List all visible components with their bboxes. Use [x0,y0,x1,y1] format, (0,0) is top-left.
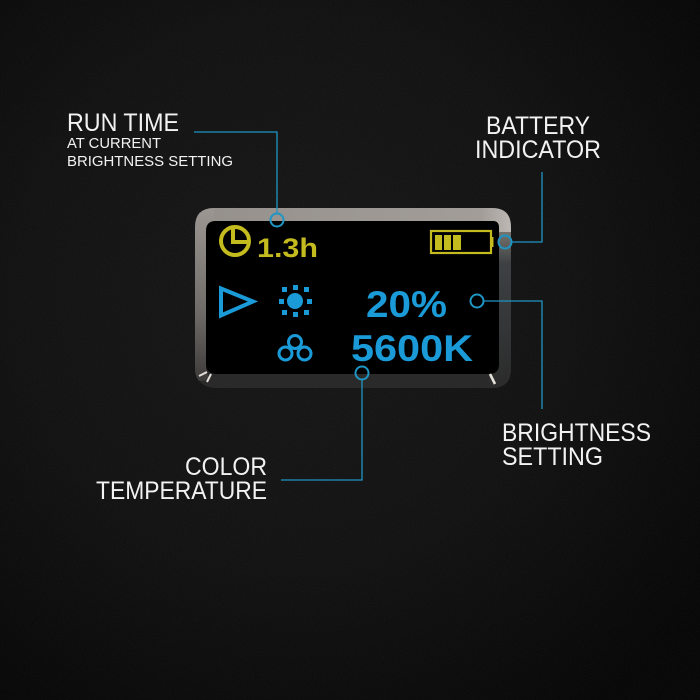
icon: clock [221,227,249,255]
label: run time [67,109,233,170]
label: brightness setting: SETTING [502,443,603,471]
display bezel [195,208,511,388]
callout: run time leader [194,132,284,226]
label: color temperature [96,453,267,505]
run time value: 1.3h [257,233,318,263]
callout: color temperature leader [281,366,368,480]
label: battery indicator: BATTERY [486,112,590,140]
brightness value: 20% [366,284,447,325]
device display [195,208,511,388]
callout: battery leader [498,172,542,248]
label: brightness setting: BRIGHTNESS [502,419,651,447]
label: color temperature: COLOR [185,453,267,481]
label: color temperature: TEMPERATURE [96,477,267,505]
label: brightness setting [502,419,651,471]
label: battery indicator: INDICATOR [475,136,601,164]
label: run time: AT CURRENT [67,136,161,152]
color temperature value: 5600K [351,328,473,369]
bezel corner glints [199,372,495,384]
label: run time: BRIGHTNESS SETTING [67,154,233,170]
label: battery indicator [475,112,601,164]
icon: play arrow [221,288,253,316]
callout: brightness leader [470,294,542,409]
icon: color circles [279,336,311,360]
icon: battery [431,231,494,253]
display screen [206,221,499,374]
label: run time: RUN TIME [67,109,179,137]
icon: brightness [279,285,312,317]
